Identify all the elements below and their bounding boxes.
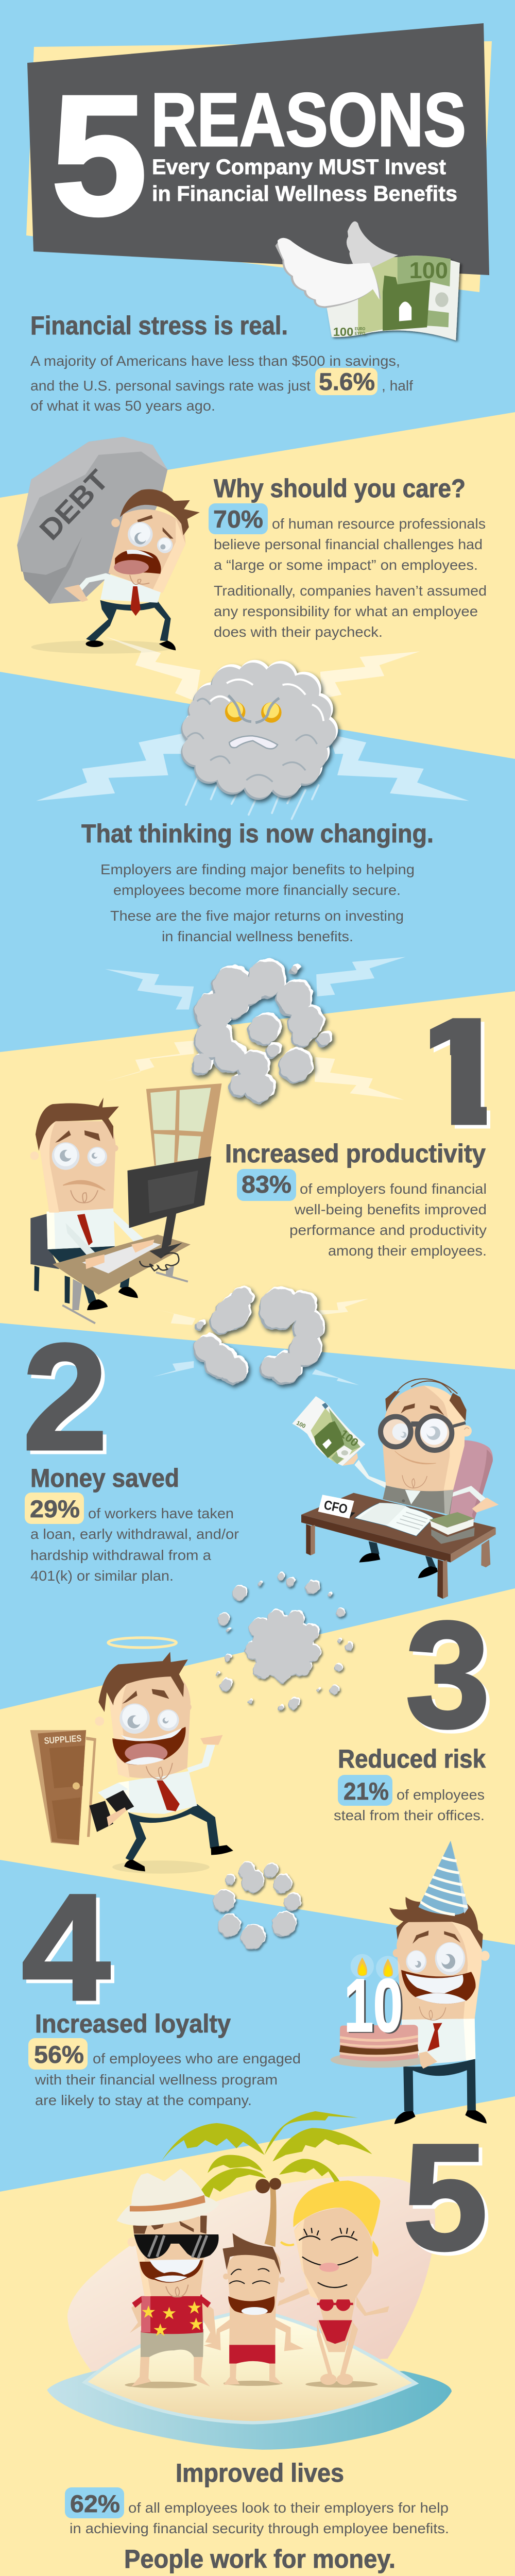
body text: hr professionals: believe personal financial challenges had (214, 536, 483, 552)
body text: engaged employees: of employees who are engaged (93, 2050, 301, 2066)
lightning bolts behind storm cloud (36, 637, 469, 801)
band: yellow stripe behind reason 1 (0, 991, 515, 1369)
body text: employee theft: steal from their offices. (334, 1807, 485, 1823)
text block: financial stress is real (30, 311, 413, 414)
body text: hr professionals (214, 516, 487, 640)
island blob backdrop (67, 2176, 435, 2372)
body text: withdrawals (30, 1505, 239, 1584)
body text: employers productivity: well-being benefits improved (294, 1201, 487, 1217)
sand (85, 2309, 416, 2422)
illustration: happy man leaving supplies closet: SUPPLIES (44, 1733, 82, 1746)
illustration: CFO at desk: 100 (295, 1420, 306, 1430)
stat highlight: 56%: 56% (34, 2041, 84, 2068)
band: yellow stripe behind reason 3 (0, 1588, 515, 1945)
title: subtitle: in Financial Wellness Benefits (152, 181, 457, 206)
stat highlight: 5.6%: 5.6% (319, 368, 375, 395)
numeral 5 at reason five: 5 (403, 2113, 488, 2282)
band: yellow area behind reason 5 and closing text (0, 2096, 515, 2576)
title: subtitle (152, 155, 457, 206)
body text: hr professionals: Traditionally, companies haven’t assumed (214, 583, 487, 599)
numeral 3: 3 (409, 1594, 494, 1763)
stat highlight: 83% (237, 1169, 296, 1201)
numeral 4: 4 (22, 1863, 111, 2032)
illustration: man carrying debt boulder: DEBT (33, 464, 114, 546)
heading: that thinking: That thinking is now changing. (81, 819, 434, 848)
title: large numeral 5: 5 (51, 60, 147, 251)
body text: engaged employees: with their financial wellness program (35, 2072, 278, 2088)
body text: hr professionals: does with their paycheck. (214, 624, 383, 640)
body text: employers finding benefits: in financial wellness benefits. (162, 928, 353, 944)
body text: employers for help (70, 2500, 449, 2536)
heading: people work for money: People work for money. (124, 2545, 396, 2573)
text block: reason 5 improved lives (65, 2459, 449, 2536)
title panel front sheet (27, 23, 489, 275)
title: subtitle: Every Company MUST Invest (152, 155, 446, 179)
heading: financial stress: Financial stress is real. (30, 311, 288, 340)
illustration: angry storm cloud (181, 660, 338, 819)
numeral 1: 1 (409, 991, 515, 1160)
heading: increased loyalty: Increased loyalty (35, 2009, 231, 2038)
icon: banknote with wings: 100 (333, 325, 353, 338)
numeral 1: 1 (405, 987, 515, 1156)
numeral 2: 2 (23, 1313, 108, 1482)
illustration: man with birthday cake and party hat (331, 1841, 490, 2124)
body text: savings statement: of what it was 50 years ago. (30, 398, 215, 414)
body text: withdrawals: hardship withdrawal from a (30, 1547, 211, 1563)
stat highlight: 83%: 83% (242, 1171, 291, 1198)
body text: employee theft (334, 1787, 485, 1823)
stat highlight: 29%: 29% (30, 1495, 80, 1522)
numeral 1 (430, 1018, 490, 1128)
heading: improved lives: Improved lives (176, 2459, 344, 2487)
body text: hr professionals: a “large or some impact” on employees. (214, 557, 478, 573)
text block: that thinking is now changing (81, 819, 434, 944)
illustration: happy man leaving supplies closet (30, 1638, 233, 1874)
illustration: smoke ring four (213, 1861, 302, 1950)
icon: banknote with wings: EURO (355, 327, 366, 331)
body text: savings statement: , half (382, 378, 413, 394)
boy (203, 2233, 304, 2385)
palm tree (162, 2111, 372, 2247)
body text: withdrawals: of workers have taken (88, 1505, 234, 1521)
water around island (47, 2370, 452, 2450)
illustration: man at desk with window (30, 1083, 222, 1324)
body text: employers productivity: among their employees. (328, 1243, 487, 1259)
illustration: man carrying debt boulder (17, 437, 200, 654)
numeral 4: 4 (25, 1867, 115, 2036)
body text: savings statement (30, 353, 413, 414)
illustration: smoke ring one (191, 958, 332, 1104)
body text: employers finding benefits: These are the five major returns on investing (110, 908, 404, 924)
heading: why should you care: Why should you care? (214, 474, 466, 503)
stat highlight: 21%: 21% (344, 1777, 389, 1805)
body text: employers finding benefits: Employers are finding major benefits to helping (100, 861, 415, 877)
icon: banknote with wings: 100 (409, 257, 448, 283)
text block: reason 4 increased loyalty (28, 2009, 301, 2108)
body text: employee theft: of employees (397, 1787, 485, 1803)
lightning bolts behind smoke ring one (105, 957, 406, 1385)
illustration: CFO at desk: 100 (337, 1427, 361, 1449)
text block: reason 3 reduced risk (334, 1744, 486, 1823)
body text: employers productivity: of employers found financial (300, 1181, 487, 1197)
body text: employers productivity: performance and productivity (289, 1222, 487, 1238)
body text: engaged employees: are likely to stay at the company. (35, 2092, 252, 2108)
stat highlight: 62%: 62% (70, 2490, 120, 2517)
illustration: island scene with family and palm (47, 2111, 452, 2450)
heading: money saved: Money saved (30, 1464, 179, 1493)
icon: banknote with wings: EYPΩ (355, 331, 365, 336)
numeral 2: 2 (26, 1316, 111, 1485)
illustration: CFO at desk: CFO (322, 1498, 349, 1517)
icon: banknote with wings (275, 222, 460, 341)
text block: reason 1 increased productivity (225, 1139, 487, 1259)
body text: withdrawals: 401(k) or similar plan. (30, 1568, 174, 1584)
body text: engaged employees (35, 2050, 301, 2108)
body text: employers for help: in achieving financial security through employee benefits. (70, 2520, 449, 2536)
illustration: CFO at desk (292, 1379, 499, 1599)
illustration: man with birthday cake and party hat: 10 (346, 1964, 404, 2048)
numeral 5 at reason five: 5 (406, 2116, 491, 2285)
heading: increased productivity: Increased productivity (225, 1139, 486, 1168)
body text: hr professionals: of human resource professionals (272, 516, 486, 532)
body text: employers for help: of all employees look to their employers for help (128, 2500, 449, 2516)
body text: employers finding benefits (100, 861, 415, 944)
body text: employers productivity (289, 1181, 487, 1259)
text block: reason 2 money saved (25, 1464, 239, 1584)
illustration: smoke burst with particles (215, 1572, 354, 1711)
body text: savings statement: and the U.S. personal savings rate was just (30, 378, 311, 394)
body text: withdrawals: a loan, early withdrawal, and/or (30, 1526, 239, 1542)
body text: savings statement: A majority of Americans have less than $500 in savings, (30, 353, 400, 369)
title panel back sheet (26, 41, 492, 292)
woman with blonde hair (278, 2180, 389, 2385)
heading: reduced risk: Reduced risk (338, 1744, 486, 1773)
illustration: man with birthday cake and party hat: 10 (344, 1963, 403, 2047)
illustration: smoke ring two (193, 1286, 325, 1385)
body text: employers finding benefits: employees become more financially secure. (113, 882, 401, 898)
band: yellow stripe behind why should you care (0, 412, 515, 759)
numeral 3: 3 (405, 1590, 490, 1759)
title: REASONS: REASONS (151, 78, 466, 162)
stat highlight: 70%: 70% (213, 505, 263, 533)
body text: hr professionals: any responsibility for what an employee (214, 603, 478, 619)
panel: title header (26, 23, 492, 292)
man with hat and sunglasses (116, 2168, 219, 2386)
text block: why should you care (209, 474, 487, 640)
